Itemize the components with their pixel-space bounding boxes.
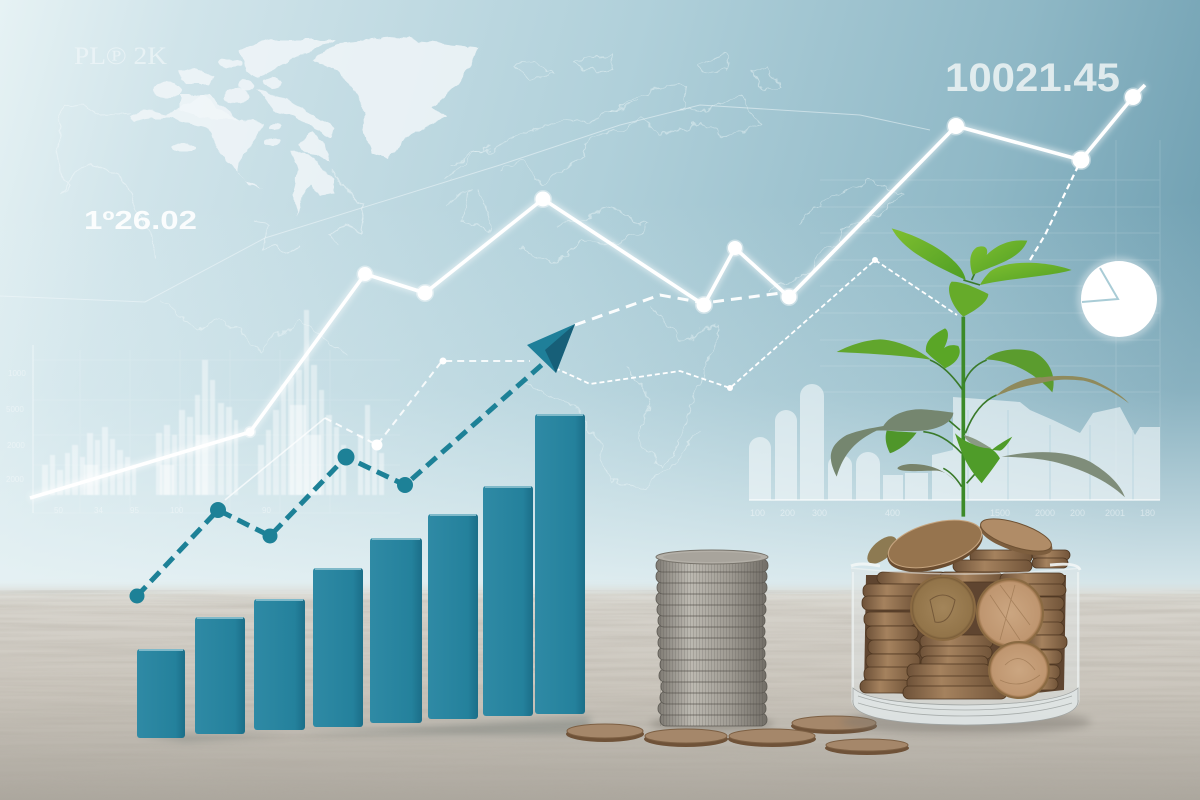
bar 2 [195,617,245,734]
right bar chart with grid: 300 [812,508,827,518]
right bar chart with grid: 100 [750,508,765,518]
right bar chart with grid: 200 [1070,508,1085,518]
world map [0,38,930,490]
left bar and grid chart [6,310,400,515]
left bar and grid chart: 100 [170,506,184,515]
number: 1026.02: 1º26.02 [84,205,197,235]
bar 1 [137,649,185,738]
pie chart icon [1077,257,1161,341]
left bar and grid chart: 2000 [7,441,25,450]
left bar and grid chart: 95 [130,506,139,515]
right bar chart with grid: 180 [1140,508,1155,518]
top coins [863,531,901,569]
glass jar with coins [841,511,1091,734]
number: 10021.45: 10021.45 [945,56,1120,100]
left bar and grid chart: 1000 [8,369,26,378]
right bar chart with grid: 2000 [1035,508,1055,518]
right bar chart with grid: 1500 [990,508,1010,518]
right bar chart with grid: 2001 [1105,508,1125,518]
left bar and grid chart: 5000 [6,405,24,414]
coin stacks [860,550,1070,699]
front coins [911,576,1049,698]
bar 8 [535,414,585,714]
right bar chart with grid: 200 [780,508,795,518]
plant [831,228,1129,517]
dashed white guide lines [225,160,1081,500]
main white line chart [30,85,1145,498]
bar 6 [428,514,478,719]
glass rim and base [851,564,1080,700]
right bar chart with grid: 400 [885,508,900,518]
left bar and grid chart: 90 [262,506,271,515]
teal bar chart [137,414,590,742]
bar 5 [370,538,422,723]
silver coin stack [650,550,774,732]
right bar chart with grid [749,140,1160,518]
teal dashed trend arrow [130,324,575,604]
coin mass [864,575,1066,696]
leaves [831,228,1129,497]
loose coins on table [566,716,909,755]
bar 7 [483,486,533,716]
table surface [0,588,1200,800]
number: PE 2K label: PL℗ 2K [74,43,167,70]
left bar and grid chart: 2000 [6,475,24,484]
left bar and grid chart: 50 [54,506,63,515]
left bar and grid chart: 34 [94,506,103,515]
bar 4 [313,568,363,727]
bar 3 [254,599,305,730]
